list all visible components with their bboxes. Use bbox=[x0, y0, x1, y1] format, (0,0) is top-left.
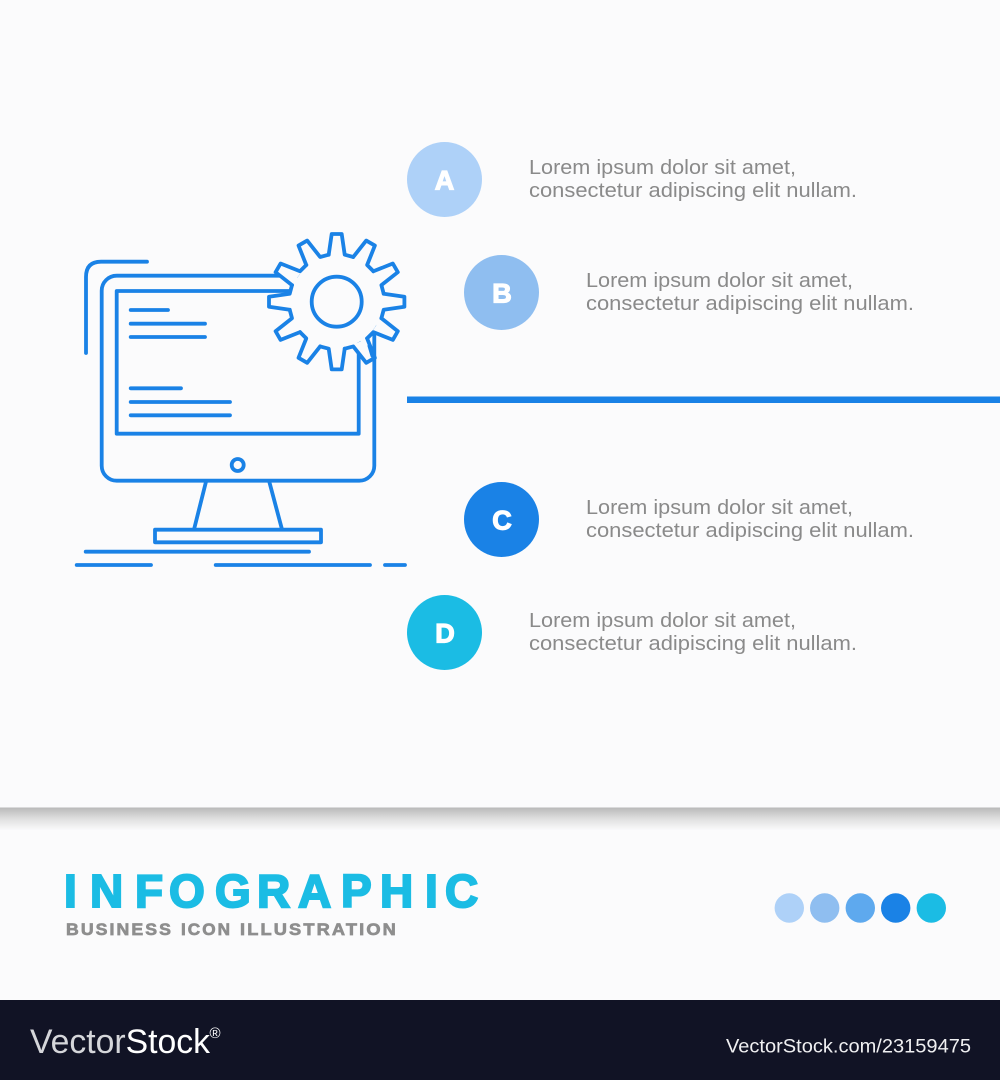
badge B bbox=[464, 255, 539, 330]
step D bbox=[407, 595, 857, 670]
watermark bar bbox=[0, 1000, 1000, 1080]
monitor stand bbox=[194, 482, 282, 528]
step B bbox=[464, 255, 914, 330]
step A bbox=[407, 142, 857, 217]
text C: consectetur adipiscing elit nullam. bbox=[586, 520, 914, 542]
code lines bbox=[131, 310, 230, 415]
badge C bbox=[464, 482, 539, 557]
text A: consectetur adipiscing elit nullam. bbox=[529, 180, 857, 202]
letter C: C bbox=[492, 506, 512, 536]
power button bbox=[232, 459, 244, 471]
divider line bbox=[407, 396, 1000, 403]
letter A: A bbox=[435, 166, 454, 196]
subtitle: BUSINESS bbox=[66, 920, 173, 939]
text B: consectetur adipiscing elit nullam. bbox=[586, 293, 914, 315]
monitor screen bbox=[117, 291, 359, 434]
text C: Lorem ipsum dolor sit amet, bbox=[586, 497, 853, 519]
text B: Lorem ipsum dolor sit amet, bbox=[586, 270, 853, 292]
subtitle: ICON bbox=[181, 920, 232, 939]
subtitle bbox=[66, 920, 398, 939]
letter D: D bbox=[435, 618, 455, 648]
monitor body bbox=[102, 276, 374, 481]
letter B: B bbox=[492, 278, 512, 308]
text A: Lorem ipsum dolor sit amet, bbox=[529, 157, 796, 179]
footer shadow band bbox=[0, 808, 1000, 830]
monitor edge over gear tooth bbox=[369, 336, 374, 362]
badge D bbox=[407, 595, 482, 670]
registered mark: ® bbox=[210, 1025, 221, 1042]
text D: consectetur adipiscing elit nullam. bbox=[529, 633, 857, 655]
text A bbox=[529, 157, 857, 202]
text D bbox=[529, 610, 857, 655]
gear bbox=[269, 234, 404, 369]
subtitle: ILLUSTRATION bbox=[240, 920, 398, 939]
title: INFOGRAPHIC bbox=[64, 865, 478, 917]
icon: back window bracket bbox=[86, 262, 147, 353]
step C bbox=[464, 482, 914, 557]
text D: Lorem ipsum dolor sit amet, bbox=[529, 610, 796, 632]
palette dots bbox=[775, 893, 946, 923]
VectorStock logo: VectorStock bbox=[30, 1023, 211, 1061]
badge A bbox=[407, 142, 482, 217]
icon: computer monitor with gear bbox=[77, 234, 405, 565]
image ID: VectorStock.com/23159475 bbox=[726, 1036, 971, 1058]
text C bbox=[586, 497, 914, 542]
ground lines bbox=[77, 552, 405, 565]
monitor base bbox=[155, 530, 321, 542]
text B bbox=[586, 270, 914, 315]
